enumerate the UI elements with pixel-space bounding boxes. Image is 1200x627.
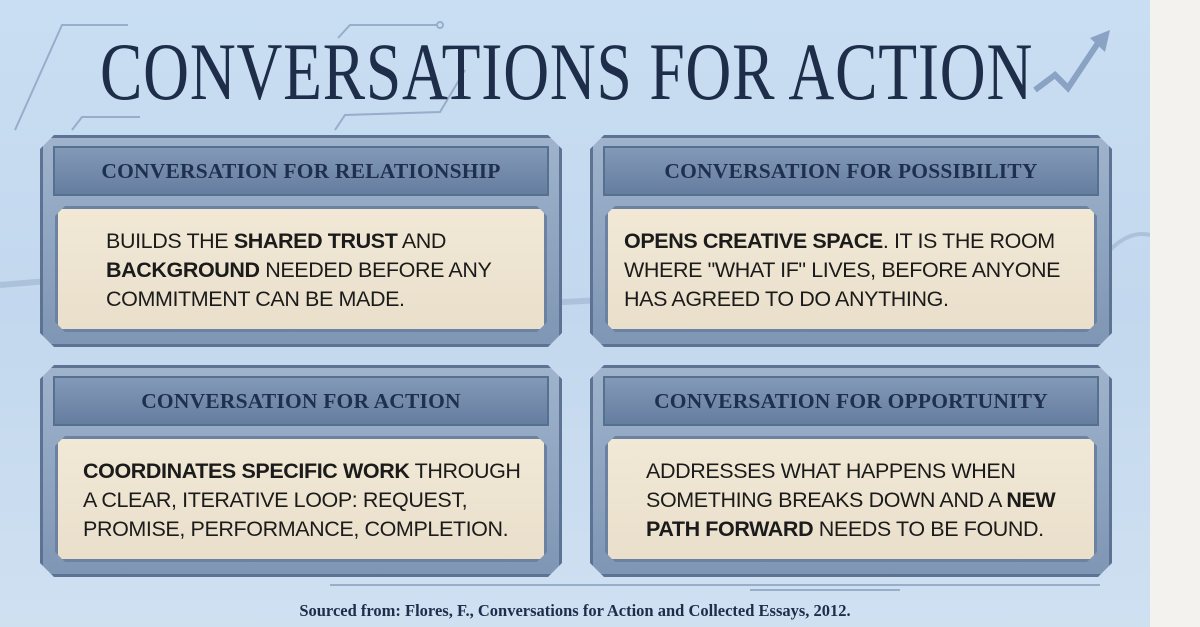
panel: action: [40, 365, 562, 577]
text: relationship: BACKGROUND NEEDED BEFORE ANY: [106, 258, 491, 282]
title: CONVERSATIONS FOR ACTION: [100, 26, 1033, 117]
heading: relationship: CONVERSATION FOR RELATIONSHIP: [101, 158, 501, 182]
text: opportunity: PATH FORWARD NEEDS TO BE FOUND.: [646, 517, 1044, 541]
text: relationship: COMMITMENT CAN BE MADE.: [106, 287, 405, 311]
text: action: [55, 436, 547, 562]
footer: source: Sourced from: Flores, F., Conversations for Action and Collected Essays, 2012.: [299, 601, 851, 620]
icon: rising arrow: [1035, 30, 1110, 90]
text: possibility: HAS AGREED TO DO ANYTHING.: [624, 287, 949, 311]
text: action: COORDINATES SPECIFIC WORK THROUGH: [83, 459, 521, 483]
heading: action: [53, 376, 549, 426]
text: possibility: WHERE "WHAT IF" LIVES, BEFORE ANYONE: [624, 258, 1060, 282]
heading: opportunity: CONVERSATION FOR OPPORTUNITY: [654, 388, 1048, 412]
text: action: A CLEAR, ITERATIVE LOOP: REQUEST,: [83, 488, 467, 512]
panel: relationship: [40, 135, 562, 347]
heading: opportunity: [603, 376, 1099, 426]
text: opportunity: [605, 436, 1097, 562]
panel: possibility: [590, 135, 1112, 347]
text: possibility: [605, 206, 1097, 332]
heading: relationship: [53, 146, 549, 196]
text: action: PROMISE, PERFORMANCE, COMPLETION.: [83, 517, 508, 541]
text: relationship: BUILDS THE SHARED TRUST AND: [106, 229, 446, 253]
text: possibility: OPENS CREATIVE SPACE. IT IS THE ROOM: [624, 229, 1055, 253]
heading: possibility: CONVERSATION FOR POSSIBILITY: [664, 158, 1038, 182]
text: opportunity: ADDRESSES WHAT HAPPENS WHEN: [646, 459, 1016, 483]
text: opportunity: SOMETHING BREAKS DOWN AND A NEW: [646, 488, 1055, 512]
heading: action: CONVERSATION FOR ACTION: [141, 388, 461, 412]
panel: opportunity: [590, 365, 1112, 577]
heading: possibility: [603, 146, 1099, 196]
text: relationship: [55, 206, 547, 332]
